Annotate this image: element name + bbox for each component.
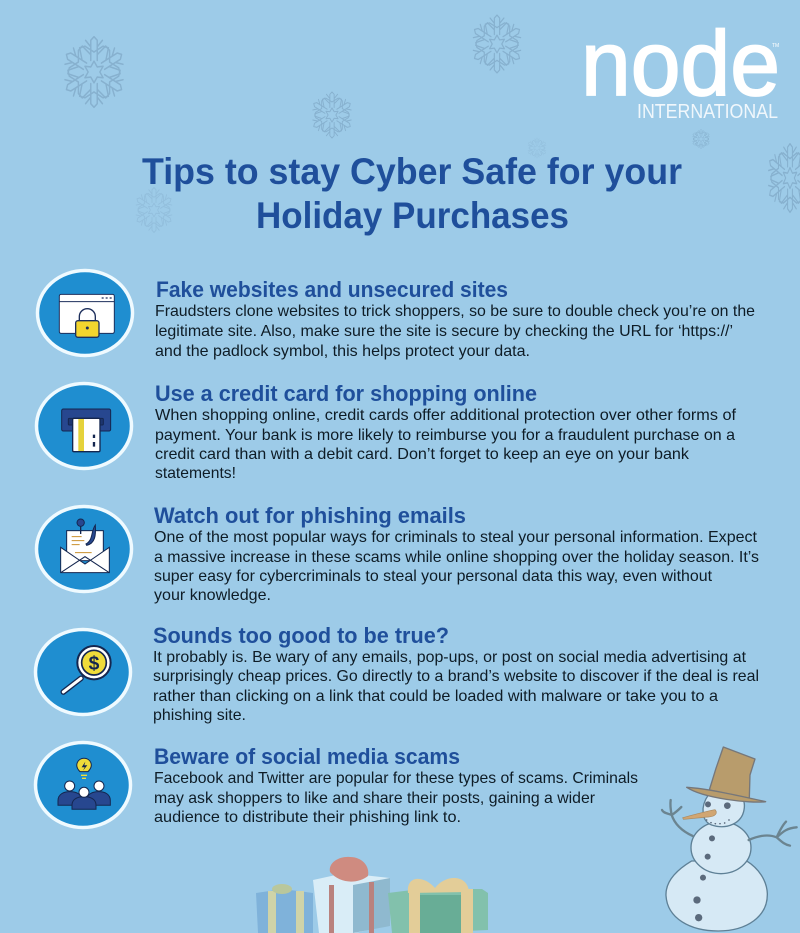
gift boxes [256,857,488,933]
heading and text: social media scams: Facebook and Twitter are popular for these types of scams. Criminals [154,770,638,787]
heading and text: too good to be true: rather than clicking on a link that could be loaded with malware or take you to a [153,688,718,705]
heading and text: phishing emails: Watch out for phishing emails [154,503,466,528]
heading and text: credit card: credit card than with a debit card. Don’t forget to keep an eye on your bank [155,446,689,463]
logo: node international: TM [772,43,779,49]
heading and text: fake websites [155,277,755,360]
blue gift [256,884,313,933]
heading and text: social media scams: Beware of social media scams [154,744,460,769]
heading and text: phishing emails: super easy for cybercriminals to steal your personal data this way, even without [154,568,713,585]
green gift [388,878,488,933]
title [142,151,682,236]
heading and text: social media scams: audience to distribute their phishing link to. [154,809,461,826]
heading and text: credit card: payment. Your bank is more likely to reimburse you for a fraudulent purchase on a [155,427,735,444]
heading and text: fake websites: Fake websites and unsecured sites [156,277,508,302]
snowman arms [662,800,797,846]
title: Tips to stay Cyber Safe for your [142,151,682,192]
heading and text: fake websites: and the padlock symbol, this helps protect your data. [155,343,530,360]
icon: magnifier with dollar: $ [89,653,100,674]
heading and text: phishing emails: your knowledge. [154,587,271,604]
logo: node international: node [581,13,780,115]
snowman nose [683,810,716,819]
icon: website padlock [38,270,132,356]
heading and text: phishing emails: a massive increase in these scams while online shopping over the holiday season. It’s [154,549,759,566]
icon: magnifier with dollar [36,630,130,714]
title: Holiday Purchases [256,195,569,236]
heading and text: too good to be true [153,623,759,724]
heading and text: credit card: statements! [155,465,236,482]
white gift [313,857,390,933]
heading and text: social media scams: may ask shoppers to like and share their posts, gaining a wider [154,790,595,807]
heading and text: too good to be true: surprisingly cheap prices. Go directly to a brand’s website to discover if the deal is real [153,668,759,685]
heading and text: fake websites: Fraudsters clone websites to trick shoppers, so be sure to double check you’re on the [155,303,755,320]
icon: social media group [36,742,130,828]
heading and text: phishing emails: One of the most popular ways for criminals to steal your personal information. Expect [154,529,758,546]
icon: phishing email [36,506,132,592]
snowman hat [687,747,766,802]
snowman body [666,795,767,931]
heading and text: too good to be true: phishing site. [153,707,246,724]
snowflake decoration [59,15,800,233]
snowman [662,747,797,931]
icon: credit card [36,384,132,468]
heading and text: credit card [155,381,737,482]
snowman buttons and face [693,801,731,921]
heading and text: credit card: When shopping online, credit cards offer additional protection over other forms of [155,407,737,424]
heading and text: social media scams [154,744,638,826]
heading and text: phishing emails [154,503,759,604]
heading and text: credit card: Use a credit card for shopping online [155,381,537,406]
heading and text: too good to be true: Sounds too good to be true? [153,623,449,648]
heading and text: fake websites: legitimate site. Also, make sure the site is secure by checking the URL for ‘https://’ [155,323,733,340]
heading and text: too good to be true: It probably is. Be wary of any emails, pop-ups, or post on social media advertising at [153,649,747,666]
logo: node international: INTERNATIONAL [637,101,778,123]
